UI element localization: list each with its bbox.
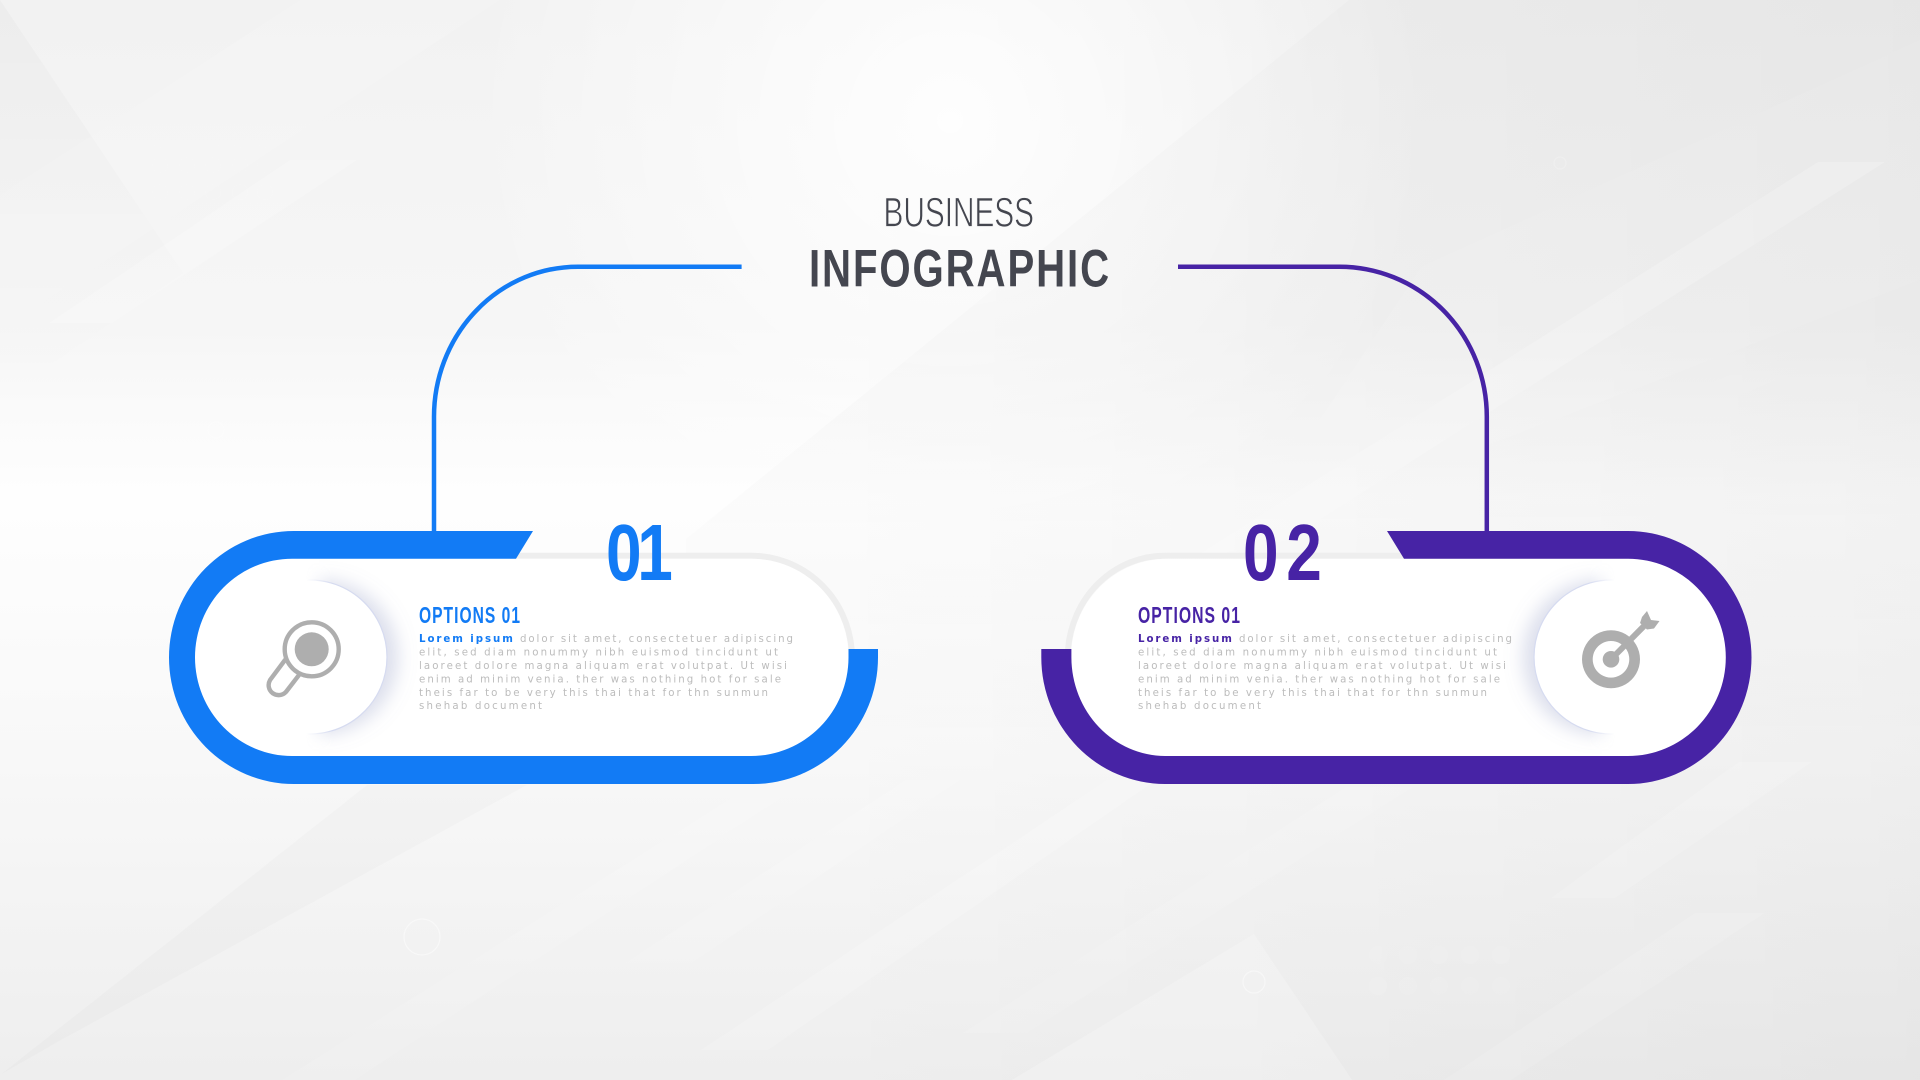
- option body text: enim ad minim venia. ther was nothing hot for sale: [419, 674, 781, 686]
- option body text: Lorem ipsum dolor sit amet, consectetuer adipiscing: [419, 634, 793, 645]
- title line: infographic: INFOGRAPHIC: [809, 240, 1111, 298]
- icon disc: [312, 575, 404, 739]
- icon: target with arrow: [1582, 611, 1660, 688]
- option body text: laoreet dolore magna aliquam erat volutpat. Ut wisi: [419, 661, 787, 672]
- title: [809, 188, 1111, 298]
- panel body: [1071, 559, 1726, 756]
- connector: blue line from title to panel 1: [434, 267, 742, 532]
- connector: purple line from title to panel 2: [1178, 267, 1487, 532]
- icon disc: [1518, 575, 1610, 739]
- option body text: enim ad minim venia. ther was nothing hot for sale: [1138, 674, 1500, 686]
- panel: option 2: [1041, 508, 1752, 784]
- panel body: [195, 559, 848, 756]
- title line: business: BUSINESS: [884, 188, 1034, 236]
- panel outline: [510, 556, 852, 650]
- option body text: elit, sed diam nonummy nibh euismod tincidunt ut: [419, 648, 778, 658]
- option body text: Lorem ipsum dolor sit amet, consectetuer adipiscing: [1138, 634, 1512, 645]
- option body text: laoreet dolore magna aliquam erat volutpat. Ut wisi: [1138, 661, 1506, 672]
- panel outline: [1068, 556, 1410, 650]
- option body text: [1138, 634, 1512, 712]
- option body text: theis far to be very this thai that for thn sunmun: [1138, 688, 1487, 699]
- option body text: elit, sed diam nonummy nibh euismod tincidunt ut: [1138, 648, 1497, 658]
- option body text: [419, 634, 793, 712]
- icon: magnifier: [269, 622, 339, 695]
- number 02: 2: [1286, 508, 1322, 598]
- option body text: shehab document: [419, 701, 542, 712]
- option heading: OPTIONS 01: [1138, 602, 1241, 628]
- number 01: 1: [637, 508, 673, 598]
- purple band: [1041, 531, 1752, 784]
- option heading: OPTIONS 01: [419, 602, 521, 628]
- panel: option 1: [169, 508, 878, 784]
- option body text: theis far to be very this thai that for thn sunmun: [419, 688, 768, 699]
- number 02: 0: [1243, 508, 1279, 598]
- blue band: [169, 531, 878, 784]
- number 01: 0: [606, 508, 642, 598]
- option body text: shehab document: [1138, 701, 1261, 712]
